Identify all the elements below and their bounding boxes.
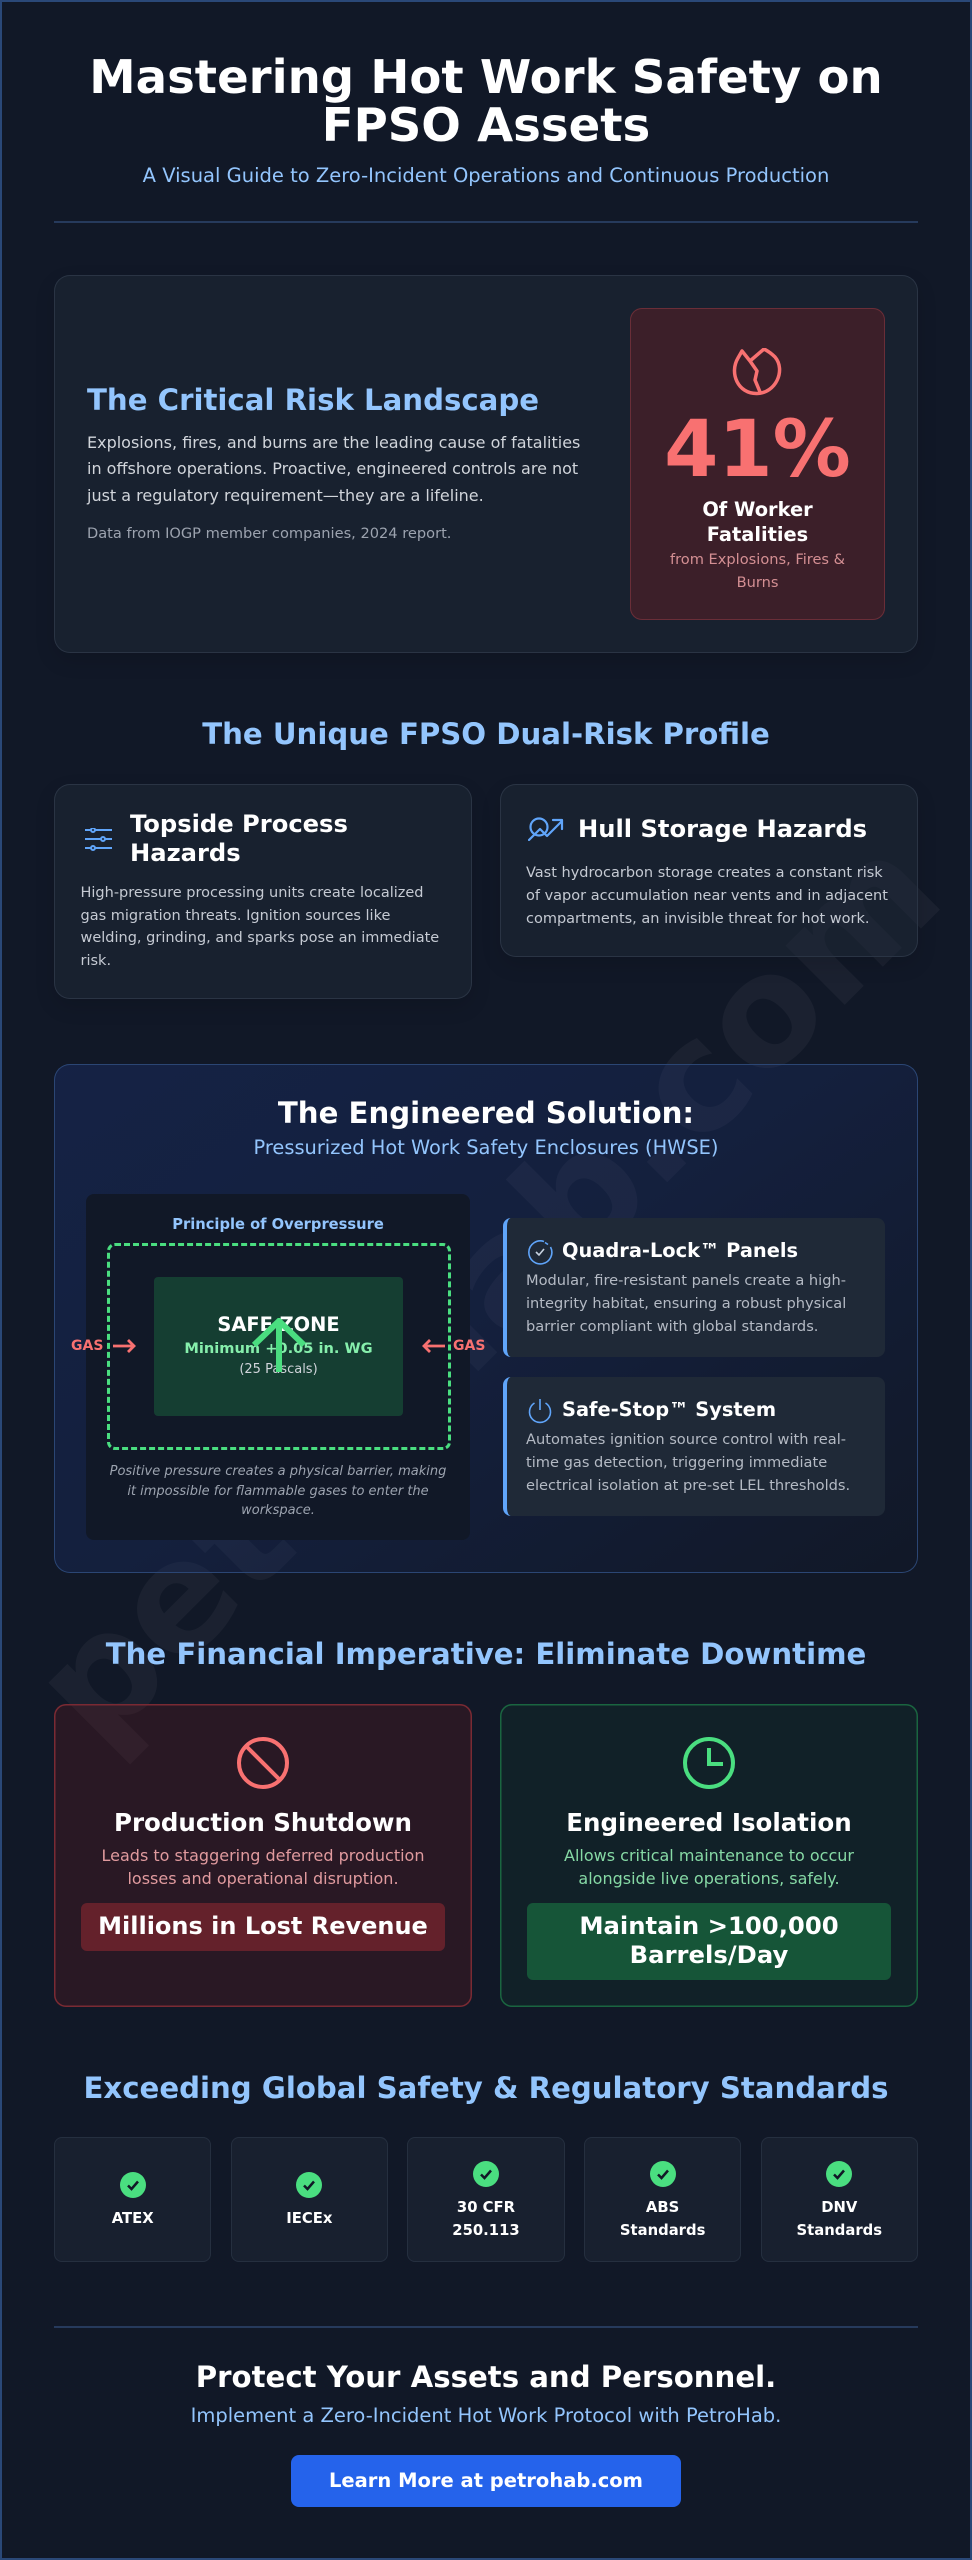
feature: Safe-Stop system — [503, 1377, 885, 1516]
panel: topside hazards — [54, 784, 472, 999]
safe zone: SAFE ZONE — [217, 1313, 340, 1336]
feature text — [526, 1272, 846, 1335]
icon: ban — [237, 1737, 289, 1789]
card text — [564, 1846, 854, 1888]
value badge: Millions in Lost Revenue — [98, 1912, 428, 1940]
standard: ABS — [584, 2137, 741, 2262]
panel: production shutdown — [54, 1704, 472, 2007]
pressurized boundary — [107, 1243, 451, 1450]
icon: check — [826, 2161, 852, 2187]
arrow: outward pressure — [252, 1318, 306, 1372]
standard: 30 CFR: 30 CFR — [457, 2199, 515, 2216]
title: FPSO Assets — [322, 98, 650, 152]
standard: 30 CFR: 250.113 — [452, 2222, 520, 2239]
text block: topside description: High-pressure processing units create localized — [80, 885, 424, 901]
text block: hull description — [526, 865, 888, 927]
feature text: time gas detection, triggering immediate — [526, 1454, 827, 1471]
stat note — [670, 551, 845, 591]
title: Mastering Hot Work Safety on — [89, 50, 883, 104]
standard: ATEX — [54, 2137, 211, 2262]
card text: losses and operational disruption. — [127, 1869, 399, 1888]
value badge — [81, 1903, 445, 1951]
stat card: 41 percent — [630, 308, 885, 620]
heading: topside — [130, 810, 348, 867]
text block: topside description: gas migration threats. Ignition sources like — [80, 908, 390, 924]
standard: DNV — [761, 2137, 918, 2262]
panel: engineered solution — [54, 1064, 918, 1573]
header — [89, 50, 883, 187]
value badge: Maintain >100,000 — [579, 1911, 839, 1940]
diagram: principle of overpressure — [86, 1194, 470, 1540]
value badge: Barrels/Day — [630, 1940, 788, 1969]
feature text: Modular, fire-resistant panels create a high- — [526, 1272, 846, 1289]
stat value: 41% — [664, 405, 851, 495]
text block: hull description: of vapor accumulation near vents and in adjacent — [526, 888, 888, 904]
feature text: electrical isolation at pre-set LEL thresholds. — [526, 1477, 850, 1494]
standard: ABS: ABS — [646, 2199, 679, 2216]
card text: Allows critical maintenance to occur — [564, 1846, 854, 1865]
arrow: gas right — [422, 1339, 445, 1353]
stat label — [702, 498, 813, 546]
diagram title: Principle of Overpressure — [172, 1216, 384, 1233]
stat label: Fatalities — [707, 523, 808, 546]
icon: clock — [683, 1737, 735, 1789]
stat note: from Explosions, Fires & — [670, 551, 845, 568]
stat note: Burns — [737, 574, 778, 591]
icon: hull gas — [528, 817, 564, 841]
standard: IECEx: IECEx — [286, 2210, 332, 2227]
icon: badge check — [528, 1240, 553, 1265]
stat label: Of Worker — [702, 498, 813, 521]
text block: hull description: compartments, an invisible threat for hot work. — [526, 911, 869, 927]
icon: sliders — [85, 828, 112, 851]
icon: check — [120, 2172, 146, 2198]
value badge — [527, 1903, 891, 1980]
icon: check — [296, 2172, 322, 2198]
subheading: HWSE: Pressurized Hot Work Safety Enclosures (HWSE) — [254, 1136, 718, 1159]
diagram caption: it impossible for flammable gases to enter the — [127, 1484, 429, 1499]
cta button — [291, 2455, 681, 2507]
panel: critical risk landscape — [54, 275, 918, 653]
standard: IECEx — [231, 2137, 388, 2262]
card title: Engineered Isolation — [566, 1808, 852, 1837]
feature title: Quadra-Lock™ Panels — [562, 1239, 798, 1262]
standard: ATEX: ATEX — [112, 2210, 154, 2227]
feature text — [526, 1431, 850, 1494]
safe zone: (25 Pascals) — [239, 1362, 318, 1377]
arrow: gas left — [113, 1339, 136, 1353]
text block: topside description — [80, 885, 439, 969]
text block: topside description: welding, grinding, and sparks pose an immediate — [80, 930, 439, 946]
icon: power — [528, 1399, 552, 1424]
source note: Data from IOGP member companies, 2024 report. — [87, 525, 451, 542]
heading: engineered solution: The Engineered Solution: — [278, 1096, 694, 1130]
card title: Production Shutdown — [114, 1808, 412, 1837]
feature: Quadra-Lock panels — [503, 1218, 885, 1357]
panel: hull hazards — [500, 784, 918, 957]
subtitle: A Visual Guide to Zero-Incident Operations and Continuous Production — [143, 164, 829, 187]
feature title: Safe-Stop™ System — [562, 1398, 776, 1421]
standard: DNV: Standards — [796, 2222, 882, 2239]
text block: risk description: just a regulatory requirement—they are a lifeline. — [87, 486, 484, 505]
text block: topside description: risk. — [80, 953, 111, 969]
cta heading: Protect Your Assets and Personnel. — [196, 2360, 776, 2394]
diagram caption: workspace. — [241, 1503, 315, 1518]
diagram caption — [110, 1464, 446, 1518]
watermark: petrohab.com — [0, 801, 972, 1777]
section heading: dual-risk profile: The Unique FPSO Dual-Risk Profile — [202, 717, 770, 751]
label: gas left: GAS — [71, 1338, 103, 1354]
feature text: Automates ignition source control with real- — [526, 1431, 846, 1448]
diagram caption: Positive pressure creates a physical barrier, making — [110, 1464, 446, 1479]
card text: Leads to staggering deferred production — [102, 1846, 424, 1865]
card text: alongside live operations, safely. — [578, 1869, 840, 1888]
standard: DNV: DNV — [821, 2199, 857, 2216]
text block: hull description: Vast hydrocarbon storage creates a constant risk — [526, 865, 883, 881]
safe zone — [154, 1277, 403, 1416]
card text — [102, 1846, 424, 1888]
title — [89, 50, 883, 152]
heading: topside: Topside Process — [130, 810, 348, 838]
text block: risk description: Explosions, fires, and burns are the leading cause of fatalities — [87, 433, 580, 452]
standard: 30 CFR — [407, 2137, 565, 2262]
heading: risk landscape: The Critical Risk Landscape — [87, 383, 539, 417]
icon: check — [650, 2161, 676, 2187]
cta subheading: Implement a Zero-Incident Hot Work Protocol with PetroHab. — [191, 2404, 781, 2427]
text block: risk description: in offshore operations. Proactive, engineered controls are not — [87, 459, 578, 478]
heading: hull: Hull Storage Hazards — [578, 815, 867, 843]
call to action — [191, 2360, 781, 2507]
icon: check — [473, 2161, 499, 2187]
safe zone: Minimum +0.05 in. WG — [184, 1340, 373, 1357]
label: gas right: GAS — [453, 1338, 485, 1354]
cta button: Learn More at petrohab.com — [329, 2469, 643, 2492]
standard: ABS: Standards — [620, 2222, 705, 2239]
icon: flame — [732, 348, 782, 396]
panel: engineered isolation — [500, 1704, 918, 2007]
heading: topside: Hazards — [130, 839, 241, 867]
section heading: financial imperative: The Financial Imperative: Eliminate Downtime — [106, 1637, 866, 1671]
section heading: standards: Exceeding Global Safety & Regulatory Standards — [83, 2071, 889, 2105]
feature text: integrity habitat, ensuring a robust physical — [526, 1295, 846, 1312]
text block: risk description — [86, 433, 580, 505]
feature text: barrier compliant with global standards. — [526, 1318, 818, 1335]
